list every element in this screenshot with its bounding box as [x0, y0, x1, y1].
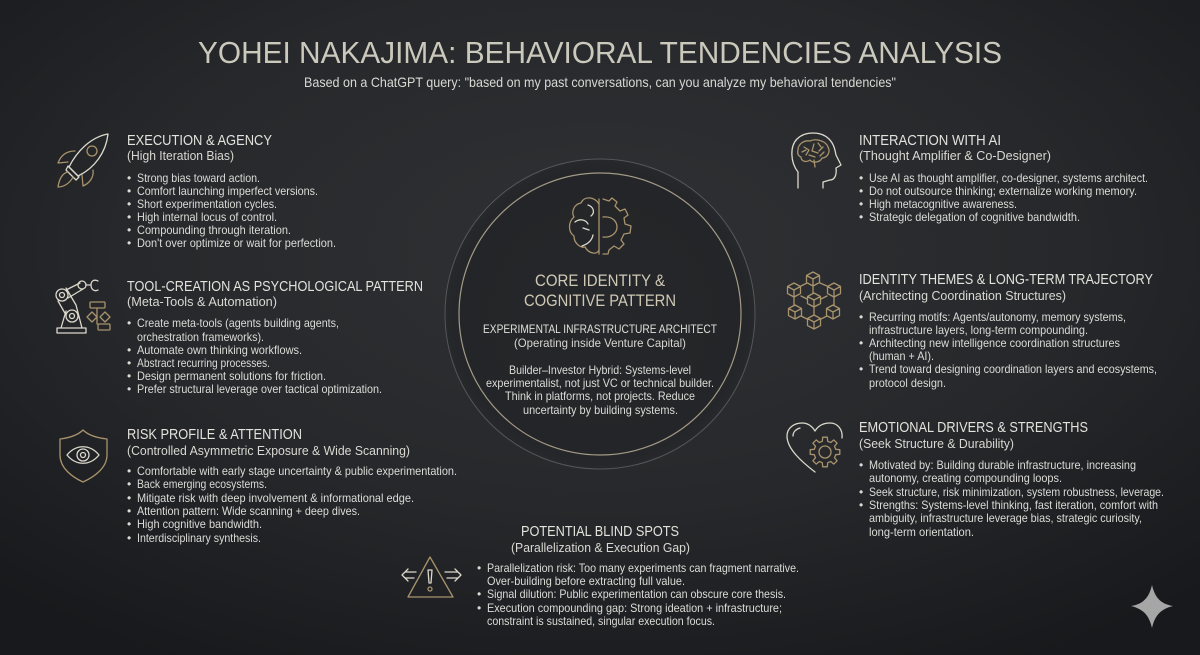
- bullet list: Architecting new intelligence coordination structures: [869, 336, 1120, 350]
- panel: identity themes: [788, 271, 1157, 390]
- bullet list: •: [127, 236, 131, 250]
- icon: warning triangle with arrows: [402, 557, 461, 597]
- bullet list: Execution compounding gap: Strong ideation + infrastructure;: [487, 601, 782, 615]
- bullet list: Short experimentation cycles.: [137, 197, 277, 211]
- heading: CORE IDENTITY &: [535, 272, 665, 290]
- bullet list: Back emerging ecosystems.: [137, 477, 267, 491]
- bullet list: Interdisciplinary synthesis.: [137, 531, 261, 545]
- bullet list: •: [477, 561, 481, 575]
- bullet list: •: [859, 458, 863, 472]
- bullet list: Comfortable with early stage uncertainty & public experimentation.: [137, 464, 457, 478]
- bullet list: •: [477, 587, 481, 601]
- bullet list: •: [127, 343, 131, 357]
- bullet list: Do not outsource thinking; externalize working memory.: [869, 184, 1137, 198]
- bullet list: Motivated by: Building durable infrastructure, increasing: [869, 458, 1136, 472]
- subheading: EXPERIMENTAL INFRASTRUCTURE ARCHITECT: [483, 322, 718, 336]
- bullet list: •: [127, 223, 131, 237]
- subheading: (Architecting Coordination Structures): [859, 288, 1066, 303]
- subtitle: Based on a ChatGPT query: "based on my past conversations, can you analyze my behavioral tendencies": [304, 74, 896, 90]
- subheading: (Seek Structure & Durability): [859, 436, 1014, 451]
- bullet list: •: [859, 184, 863, 198]
- bullet list: •: [859, 485, 863, 499]
- subheading: [483, 322, 718, 350]
- bullet list: orchestration frameworks).: [137, 330, 264, 344]
- bullet list: constraint is sustained, singular execution focus.: [487, 614, 715, 628]
- bullet list: Strong bias toward action.: [137, 171, 260, 185]
- bullet list: [859, 171, 1148, 224]
- text block: experimentalist, not just VC or technical builder.: [486, 376, 714, 390]
- subheading: (Parallelization & Execution Gap): [511, 540, 690, 555]
- text block: Think in platforms, not projects. Reduce: [505, 389, 695, 403]
- bullet list: •: [127, 382, 131, 396]
- panel: execution and agency: [58, 132, 336, 250]
- heading: TOOL-CREATION AS PSYCHOLOGICAL PATTERN: [127, 278, 423, 295]
- bullet list: Strengths: Systems-level thinking, fast iteration, comfort with: [869, 498, 1158, 512]
- bullet list: ambiguity, infrastructure leverage bias, strategic curiosity,: [869, 511, 1142, 525]
- panel: risk profile: [60, 426, 457, 545]
- bullet list: Don't over optimize or wait for perfection.: [137, 236, 336, 250]
- text block: Builder–Investor Hybrid: Systems-level: [509, 363, 691, 377]
- bullet list: •: [859, 498, 863, 512]
- icon: sparkle watermark: [1131, 585, 1173, 628]
- bullet list: Strategic delegation of cognitive bandwidth.: [869, 210, 1080, 224]
- icon: head with brain: [792, 133, 841, 188]
- bullet list: [127, 316, 382, 396]
- bullet list: long-term orientation.: [869, 525, 974, 539]
- text block: uncertainty by building systems.: [523, 403, 678, 417]
- bullet list: •: [859, 336, 863, 350]
- icon: robot arm and flowchart: [56, 280, 110, 333]
- icon: shield with eye: [60, 430, 107, 482]
- heading: EXECUTION & AGENCY: [127, 132, 272, 149]
- bullet list: •: [859, 171, 863, 185]
- bullet list: •: [127, 356, 131, 370]
- text block: [486, 363, 714, 417]
- subheading: (Operating inside Venture Capital): [514, 336, 686, 350]
- subheading: (Thought Amplifier & Co-Designer): [859, 148, 1051, 163]
- heading: COGNITIVE PATTERN: [524, 292, 676, 310]
- bullet list: protocol design.: [869, 376, 946, 390]
- panel: potential blind spots: [402, 523, 799, 628]
- bullet list: Create meta-tools (agents building agents,: [137, 316, 339, 330]
- icon: rocket: [58, 134, 108, 187]
- bullet list: •: [127, 316, 131, 330]
- bullet list: Automate own thinking workflows.: [137, 343, 302, 357]
- bullet list: Parallelization risk: Too many experiments can fragment narrative.: [487, 561, 799, 575]
- bullet list: •: [859, 310, 863, 324]
- bullet list: •: [127, 171, 131, 185]
- panel: core identity circle: [445, 159, 755, 469]
- bullet list: High internal locus of control.: [137, 210, 277, 224]
- bullet list: (human + AI).: [869, 349, 934, 363]
- heading: INTERACTION WITH AI: [859, 132, 1001, 149]
- bullet list: •: [127, 197, 131, 211]
- subheading: (High Iteration Bias): [127, 148, 234, 163]
- icon: cube network: [788, 272, 840, 329]
- bullet list: •: [859, 197, 863, 211]
- icon: heart with gear: [787, 423, 842, 472]
- bullet list: [127, 464, 457, 545]
- bullet list: •: [859, 362, 863, 376]
- bullet list: Design permanent solutions for friction.: [137, 369, 326, 383]
- panel: interaction with AI: [792, 132, 1148, 224]
- bullet list: Use AI as thought amplifier, co-designer, systems architect.: [869, 171, 1148, 185]
- icon: brain and gear: [570, 198, 631, 254]
- bullet list: Compounding through iteration.: [137, 223, 291, 237]
- bullet list: Recurring motifs: Agents/autonomy, memory systems,: [869, 310, 1126, 324]
- bullet list: •: [127, 210, 131, 224]
- bullet list: •: [127, 531, 131, 545]
- bullet list: Over-building before extracting full value.: [487, 574, 685, 588]
- panel: tool creation: [56, 278, 423, 396]
- bullet list: Trend toward designing coordination layers and ecosystems,: [869, 362, 1157, 376]
- bullet list: Abstract recurring processes.: [137, 356, 270, 370]
- bullet list: Attention pattern: Wide scanning + deep dives.: [137, 504, 360, 518]
- bullet list: infrastructure layers, long-term compounding.: [869, 323, 1088, 337]
- bullet list: Seek structure, risk minimization, system robustness, leverage.: [869, 485, 1164, 499]
- bullet list: •: [477, 601, 481, 615]
- heading: EMOTIONAL DRIVERS & STRENGTHS: [859, 419, 1088, 436]
- heading: RISK PROFILE & ATTENTION: [127, 426, 302, 443]
- subheading: (Controlled Asymmetric Exposure & Wide Scanning): [127, 443, 410, 458]
- bullet list: Comfort launching imperfect versions.: [137, 184, 318, 198]
- bullet list: High cognitive bandwidth.: [137, 517, 262, 531]
- bullet list: •: [127, 517, 131, 531]
- bullet list: [477, 561, 799, 628]
- bullet list: •: [127, 491, 131, 505]
- panel: emotional drivers: [787, 419, 1164, 539]
- heading: POTENTIAL BLIND SPOTS: [521, 523, 679, 540]
- bullet list: •: [127, 184, 131, 198]
- heading: [524, 272, 676, 310]
- bullet list: Signal dilution: Public experimentation can obscure core thesis.: [487, 587, 786, 601]
- bullet list: •: [127, 477, 131, 491]
- bullet list: [127, 171, 336, 250]
- heading: IDENTITY THEMES & LONG-TERM TRAJECTORY: [859, 271, 1153, 288]
- bullet list: Mitigate risk with deep involvement & informational edge.: [137, 491, 414, 505]
- title: YOHEI NAKAJIMA: BEHAVIORAL TENDENCIES ANALYSIS: [198, 35, 1002, 70]
- bullet list: •: [127, 464, 131, 478]
- bullet list: •: [127, 369, 131, 383]
- bullet list: Prefer structural leverage over tactical optimization.: [137, 382, 382, 396]
- bullet list: •: [127, 504, 131, 518]
- bullet list: autonomy, creating compounding loops.: [869, 471, 1062, 485]
- bullet list: •: [859, 210, 863, 224]
- subheading: (Meta-Tools & Automation): [127, 294, 277, 309]
- bullet list: [859, 310, 1157, 390]
- bullet list: [859, 458, 1164, 539]
- bullet list: High metacognitive awareness.: [869, 197, 1017, 211]
